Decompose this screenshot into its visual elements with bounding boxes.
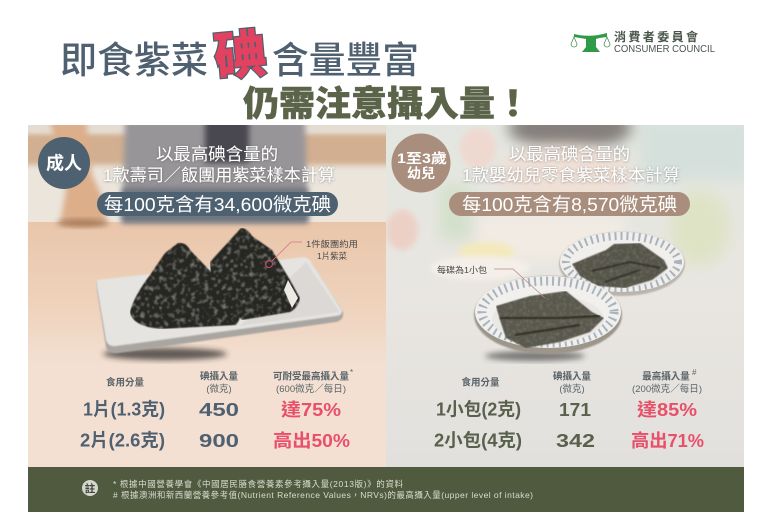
note text: * 根據中國營養學會《中國居民膳食營養素參考攝入量(2013版)》的資料 xyxy=(113,479,403,489)
note text: # 根據澳洲和新西蘭營養參考值(Nutrient Reference Values，NRVs)的最高攝入量(upper level of intake) xyxy=(113,490,533,500)
table headers: 食用分量 xyxy=(106,376,144,388)
table headers: 碘攝入量 xyxy=(553,370,591,382)
adult sample description xyxy=(103,145,335,185)
row: one sheet: 450 xyxy=(199,400,239,420)
row: two sheets: 高出50% xyxy=(273,430,350,451)
row: one sheet: 達75% xyxy=(281,400,341,420)
toddler background photo xyxy=(386,106,750,467)
back dish xyxy=(559,232,685,296)
callout: one rice ball uses one sheet: 1件飯團約用 xyxy=(306,239,358,249)
table headers: (200微克／每日) xyxy=(632,383,702,395)
badge: toddlers aged 1 to 3: 幼兒 xyxy=(407,165,436,181)
logo: consumer council xyxy=(571,29,715,55)
icon: scales xyxy=(571,33,610,52)
row: one pack: 1小包(2克) xyxy=(436,400,521,420)
row: one sheet xyxy=(83,400,341,420)
table headers: (微克) xyxy=(559,383,585,395)
row: two sheets: 2片(2.6克) xyxy=(80,430,165,450)
note text xyxy=(113,479,533,500)
callout: one rice ball uses one sheet xyxy=(266,239,358,268)
row: two packs: 高出71% xyxy=(631,430,704,451)
row: one pack: 171 xyxy=(559,400,591,420)
row: one sheet: 1片(1.3克) xyxy=(83,400,165,420)
logo: consumer council: CONSUMER COUNCIL xyxy=(614,44,715,55)
table headers: 碘攝入量 xyxy=(200,370,238,382)
panel: adults xyxy=(20,116,400,467)
table headers: 可耐受最高攝入量 xyxy=(273,370,349,382)
table headers: * xyxy=(350,368,353,377)
table headers: 食用分量 xyxy=(461,376,500,388)
callout: each dish is one pack xyxy=(437,265,545,298)
front dish xyxy=(474,276,622,354)
table headers: (600微克／每日) xyxy=(276,383,346,395)
adult iodine content pill: 每100克含有34,600微克碘 xyxy=(104,194,331,215)
badge: adult: 成人 xyxy=(46,152,82,174)
title line one xyxy=(60,40,419,81)
row: two packs xyxy=(434,430,704,451)
icon: note marker xyxy=(82,480,98,496)
row: two sheets: 900 xyxy=(199,431,239,451)
photo: seaweed on two dishes xyxy=(474,232,685,361)
row: two packs: 342 xyxy=(556,431,595,451)
title xyxy=(60,26,531,124)
footer: notes xyxy=(28,467,744,512)
row: one pack xyxy=(436,400,697,420)
adult background photo xyxy=(20,116,400,467)
row: two packs: 2小包(4克) xyxy=(434,430,522,450)
callout: one rice ball uses one sheet: 1片紫菜 xyxy=(317,251,347,261)
title line two: 仍需注意攝入量！ xyxy=(243,84,531,124)
badge: toddlers aged 1 to 3 xyxy=(392,134,450,192)
toddler sample description xyxy=(462,145,680,185)
table: adult intake xyxy=(80,368,353,451)
adult sample description: 以最高碘含量的 xyxy=(156,145,278,164)
toddler sample description: 以最高碘含量的 xyxy=(509,145,630,164)
title line one: 即食紫菜 xyxy=(60,40,208,81)
icon: note marker: 註 xyxy=(85,482,96,495)
table headers: 最高攝入量 xyxy=(642,370,690,382)
photo: rice balls on plate xyxy=(97,228,343,360)
table: toddler intake xyxy=(434,368,704,451)
row: two sheets xyxy=(80,430,350,451)
highlighted word: iodine: 碘 xyxy=(212,26,269,88)
table headers: (微克) xyxy=(206,383,232,395)
callout: each dish is one pack: 每碟為1小包 xyxy=(437,265,488,275)
row: one pack: 達85% xyxy=(637,400,697,420)
table headers xyxy=(106,368,353,395)
table headers: # xyxy=(692,368,697,377)
badge: adult xyxy=(38,137,90,189)
panel: toddlers xyxy=(386,106,750,467)
toddler iodine content pill: 每100克含有8,570微克碘 xyxy=(462,194,677,215)
table headers xyxy=(461,368,702,395)
toddler sample description: 1款嬰幼兒零食紫菜樣本計算 xyxy=(462,165,680,185)
logo text: 消費者委員會 xyxy=(614,29,698,44)
badge: toddlers aged 1 to 3: 1至3歲 xyxy=(397,150,448,166)
adult sample description: 1款壽司／飯團用紫菜樣本計算 xyxy=(103,165,335,185)
title line one: 含量豐富 xyxy=(272,40,419,81)
